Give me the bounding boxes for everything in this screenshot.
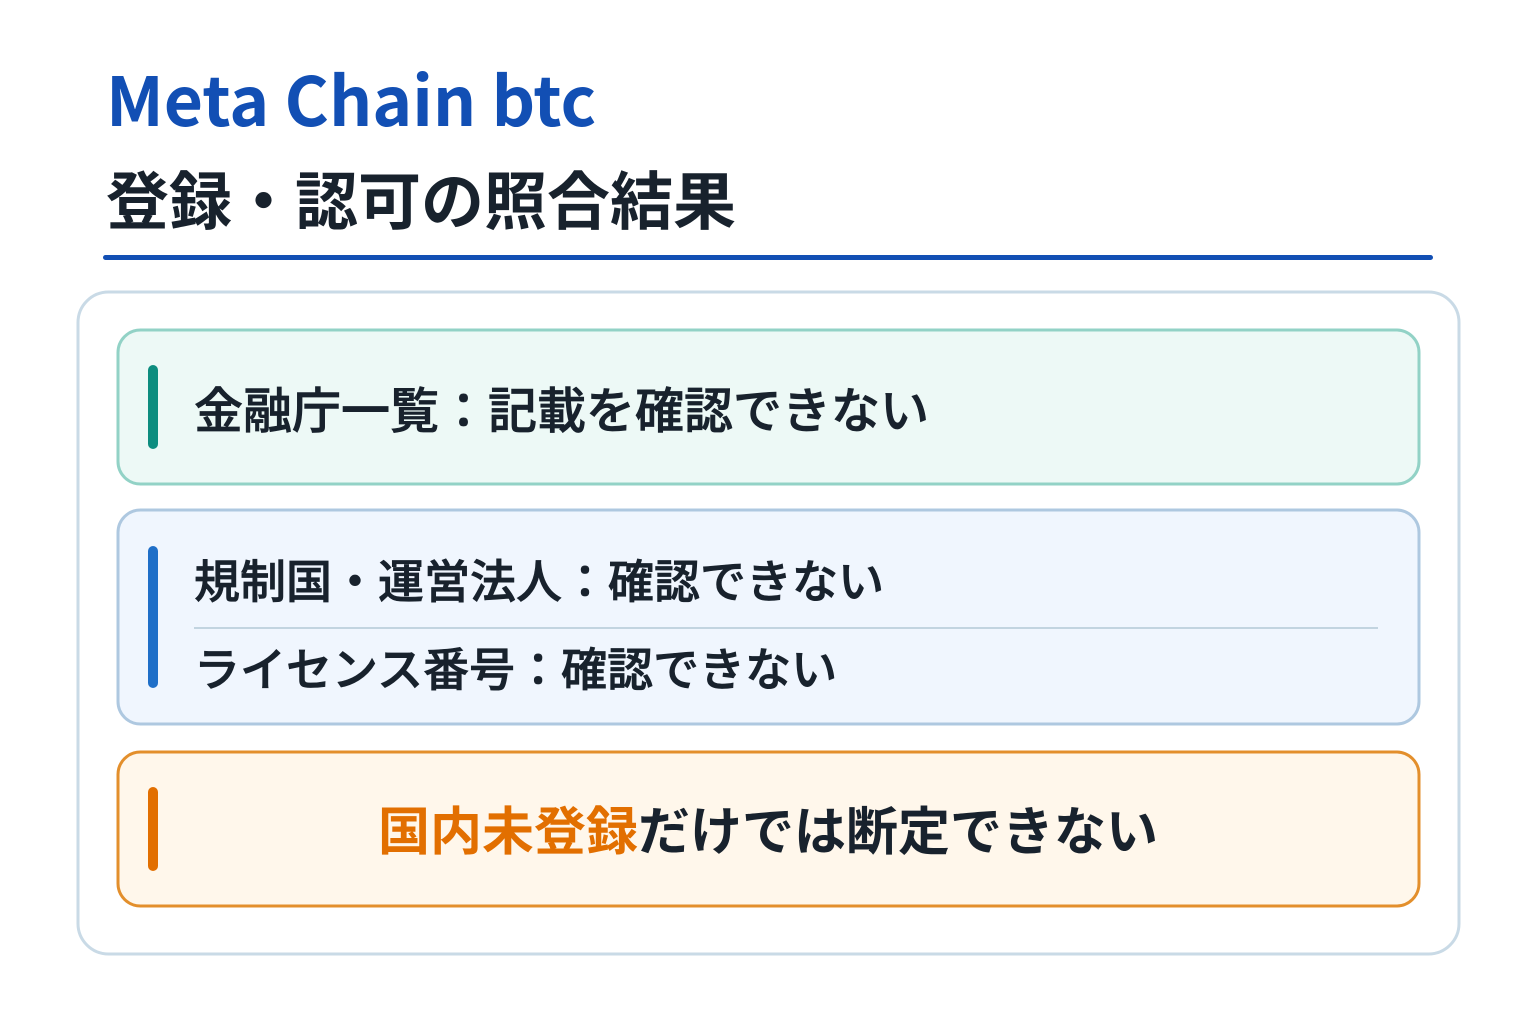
panel: regulator and license	[116, 508, 1420, 726]
text: regulator: 規制国・運営法人：確認できない	[194, 546, 884, 612]
accent bar: teal	[148, 365, 158, 449]
text: conclusion: 国内未登録だけでは断定できない	[378, 790, 1158, 865]
panel: FSA list result	[116, 328, 1420, 486]
panel: outer card	[76, 290, 1460, 956]
title: Meta Chain btc: Meta Chain btc	[106, 48, 596, 146]
panel: conclusion	[116, 750, 1420, 908]
accent bar: orange	[148, 787, 158, 871]
row divider	[194, 627, 1378, 629]
text: license: ライセンス番号：確認できない	[194, 634, 837, 700]
subtitle: 登録・認可の照合結果	[106, 152, 736, 243]
text: FSA list: 金融庁一覧：記載を確認できない	[194, 372, 929, 443]
heading underline	[103, 255, 1433, 260]
accent bar: blue	[148, 546, 158, 688]
